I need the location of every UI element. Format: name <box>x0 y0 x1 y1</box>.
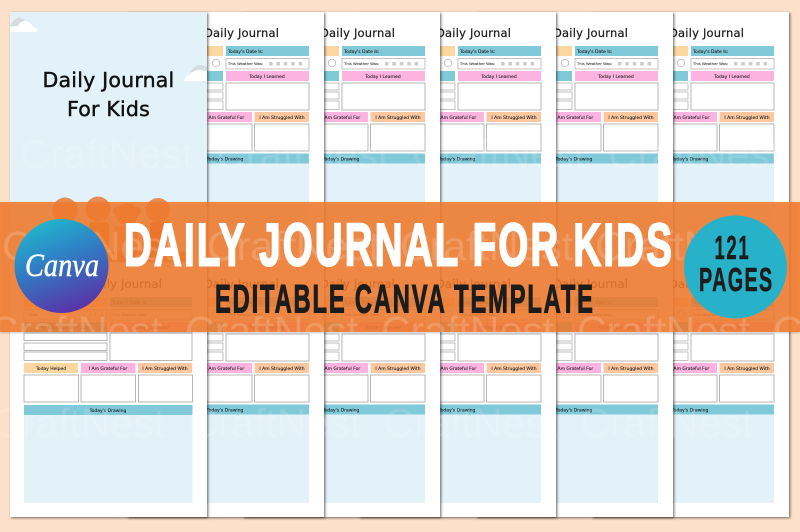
heading: banner subtitle: EDITABLE CANVA TEMPLATE <box>215 277 593 321</box>
watermark row: CraftNest <box>595 223 769 269</box>
panel: journal page 3: Today's Date Is: <box>343 300 379 306</box>
panel: journal page 4: Daily Journal <box>436 26 511 40</box>
panel: journal page 3: Daily Journal <box>320 26 395 40</box>
watermark clipped row <box>0 308 800 354</box>
watermark upper and lower rows: CraftNest <box>580 400 754 446</box>
first journal sheet: three columns: I Am Struggled With <box>142 366 188 372</box>
panel: journal page 2 <box>127 12 324 517</box>
panel: journal page 5: Today's Drawing <box>555 408 593 414</box>
panel: journal page 4: I Am Struggled With <box>491 115 537 121</box>
panel: journal page 3: I Am Struggled With <box>375 115 421 121</box>
first journal sheet: three columns: Today Helped <box>35 366 66 372</box>
panel: journal page 2: This Weather Was: <box>227 61 263 66</box>
panel: journal page 5: Daily Journal <box>553 26 628 40</box>
icon: Canva badge: Canva <box>25 248 99 284</box>
watermark clipped row: CraftNest <box>185 308 359 354</box>
first journal sheet: header row: I Feel: <box>27 312 38 317</box>
watermark clipped row: CraftNest <box>577 308 751 354</box>
first journal sheet: lined boxes <box>24 333 192 360</box>
badge: 121 pages: PAGES <box>699 261 772 298</box>
panel: journal page 3: Today I Learned <box>364 74 401 80</box>
panel: journal page 4: Today's Date Is: <box>459 49 495 55</box>
watermark row: CraftNest <box>2 223 176 269</box>
panel: journal page 5: Today I Learned <box>597 74 634 80</box>
badge: 121 pages: 121 <box>714 229 749 266</box>
panel: journal page 4: Today's Drawing <box>438 408 476 414</box>
panel: journal page 2: Today I Learned <box>248 325 285 331</box>
panel: journal page 2: Today's Date Is: <box>227 300 263 306</box>
watermark upper and lower rows: CraftNest <box>384 400 558 446</box>
panel: journal page 5: This Weather Was: <box>576 312 612 317</box>
icon: right cloud <box>184 65 207 81</box>
panel: journal page 3: I Am Grateful For <box>322 115 360 121</box>
panel: journal page 6: I Am Struggled With <box>724 366 770 372</box>
banner <box>0 202 800 332</box>
panel: journal page 2: I Am Grateful For <box>206 115 244 121</box>
first journal sheet: header row: The Best Part of My Day <box>37 325 92 331</box>
watermark clipped row: CraftNest <box>381 308 555 354</box>
panel: journal page 6: Daily Journal <box>669 277 744 291</box>
badge: 121 pages <box>684 216 787 318</box>
watermark row: CraftNest <box>400 223 574 269</box>
panel: journal page 6: This Weather Was: <box>692 312 728 317</box>
first journal sheet: drawing area: Today's Drawing <box>89 408 127 414</box>
panel: journal page 3: This Weather Was: <box>343 312 379 317</box>
panel: journal page 6: I Am Struggled With <box>724 115 770 121</box>
watermark upper and lower rows: CraftNest <box>188 400 362 446</box>
panel: journal page 2: Daily Journal <box>204 277 279 291</box>
heading: banner title: DAILY JOURNAL FOR KIDS <box>124 211 672 279</box>
panel: journal page 4: I Am Struggled With <box>491 366 537 372</box>
panel: front page <box>10 12 207 517</box>
first journal sheet: drawing area <box>24 405 192 503</box>
panel: journal page 6: Today's Drawing <box>671 156 709 162</box>
cover title: Daily Journal <box>43 68 174 92</box>
panel: journal page 3: Today's Drawing <box>322 156 360 162</box>
panel: journal page 3: I Am Grateful For <box>322 366 360 372</box>
watermark row <box>2 223 769 269</box>
panel: journal page 4: This Weather Was: <box>459 61 495 66</box>
panel: journal page 6: Today I Felt Today <box>626 74 667 80</box>
panel: journal page 6: I Am Grateful For <box>671 115 709 121</box>
watermark upper and lower rows: CraftNest <box>216 131 390 177</box>
panel: journal page 6: I Am Grateful For <box>671 366 709 372</box>
panel: journal page 6: Today's Date Is: <box>692 49 728 55</box>
panel: journal page 6: This Weather Was: <box>692 61 728 66</box>
panel: journal page 5: Today's Date Is: <box>576 300 612 306</box>
panel: journal page 4: Today's Date Is: <box>459 300 495 306</box>
panel: journal page 2: This Weather Was: <box>227 312 263 317</box>
panel: journal page 5: This Weather Was: <box>576 61 612 66</box>
panel: journal page 5: I Am Struggled With <box>608 366 654 372</box>
panel: journal page 3: Today I Felt Today <box>277 74 318 80</box>
panel: journal page 5: Today's Date Is: <box>576 49 612 55</box>
panel: journal page 3: I Am Struggled With <box>375 366 421 372</box>
panel: journal page 3: Today's Date Is: <box>343 49 379 55</box>
panel: journal page 6: Today I Learned <box>713 74 750 80</box>
panel: journal page 2: Daily Journal <box>204 26 279 40</box>
panel: journal page 3 <box>243 12 440 517</box>
panel: journal page 2: Today's Date Is: <box>227 49 263 55</box>
first journal sheet: header row <box>24 297 192 332</box>
first journal sheet: three columns <box>24 363 192 402</box>
panel: journal page 5: Today I Felt Today <box>510 74 551 80</box>
panel: journal page 6: Today I Learned <box>713 325 750 331</box>
cover subtitle: For Kids <box>67 97 150 121</box>
panel: journal page 2: Today I Learned <box>248 74 285 80</box>
panel: journal page 4: Today I Learned <box>480 74 517 80</box>
first journal sheet: header row: This Weather Was: <box>111 312 147 317</box>
panel: journal page 5: I Am Grateful For <box>555 115 593 121</box>
panel: journal page 2: Today I Felt Today <box>161 74 202 80</box>
panel: journal page 4: Today I Felt Today <box>393 74 434 80</box>
panel: journal page 3: Today I Learned <box>364 325 401 331</box>
first journal sheet: header row: Today's Date Is: <box>111 300 147 306</box>
panel: journal page 4: This Weather Was: <box>459 312 495 317</box>
icon: top cloud <box>10 18 37 32</box>
panel: journal page 4: I Am Grateful For <box>438 115 476 121</box>
first journal sheet: title: Daily Journal <box>87 277 162 291</box>
panel: journal page 3: This Weather Was: <box>343 61 379 66</box>
panel: journal page 4: Daily Journal <box>436 277 511 291</box>
first journal sheet: header row: Today I Learned <box>132 325 169 331</box>
panel: journal page 5: I Am Grateful For <box>555 366 593 372</box>
panel: journal page 2: Today's Drawing <box>206 408 244 414</box>
panel: journal page 6: Today's Drawing <box>671 408 709 414</box>
panel: journal page 5: Today I Learned <box>597 325 634 331</box>
watermark upper and lower rows: CraftNest <box>412 131 586 177</box>
panel: journal page 6: Daily Journal <box>669 26 744 40</box>
panel: journal page 5 <box>476 12 673 517</box>
panel: journal page 4 <box>359 12 556 517</box>
panel: journal page 4: I Am Grateful For <box>438 366 476 372</box>
panel: journal page 6: Today's Date Is: <box>692 300 728 306</box>
panel: journal page 2: I Am Struggled With <box>259 366 305 372</box>
first journal sheet: three columns: I Am Grateful For <box>89 366 127 372</box>
watermark row: CraftNest <box>207 223 381 269</box>
panel: journal page 5: I Am Struggled With <box>608 115 654 121</box>
panel: journal page 6 <box>592 12 789 517</box>
panel: journal page 4: Today I Learned <box>480 325 517 331</box>
panel: journal page 3: Today's Drawing <box>322 408 360 414</box>
panel: journal page 3: Daily Journal <box>320 277 395 291</box>
watermark upper and lower rows <box>0 131 782 446</box>
panel: journal page 2: I Am Grateful For <box>206 366 244 372</box>
illustration: kids <box>24 196 192 262</box>
watermark upper and lower rows: CraftNest <box>608 131 782 177</box>
panel: journal page 4: Today's Drawing <box>438 156 476 162</box>
panel: journal page 5: Daily Journal <box>553 277 628 291</box>
watermark upper and lower rows: CraftNest <box>20 131 194 177</box>
icon: Canva badge <box>14 219 108 313</box>
panel: journal page 5: Today's Drawing <box>555 156 593 162</box>
panel: journal page 2: I Am Struggled With <box>259 115 305 121</box>
panel: journal page 2: Today's Drawing <box>206 156 244 162</box>
